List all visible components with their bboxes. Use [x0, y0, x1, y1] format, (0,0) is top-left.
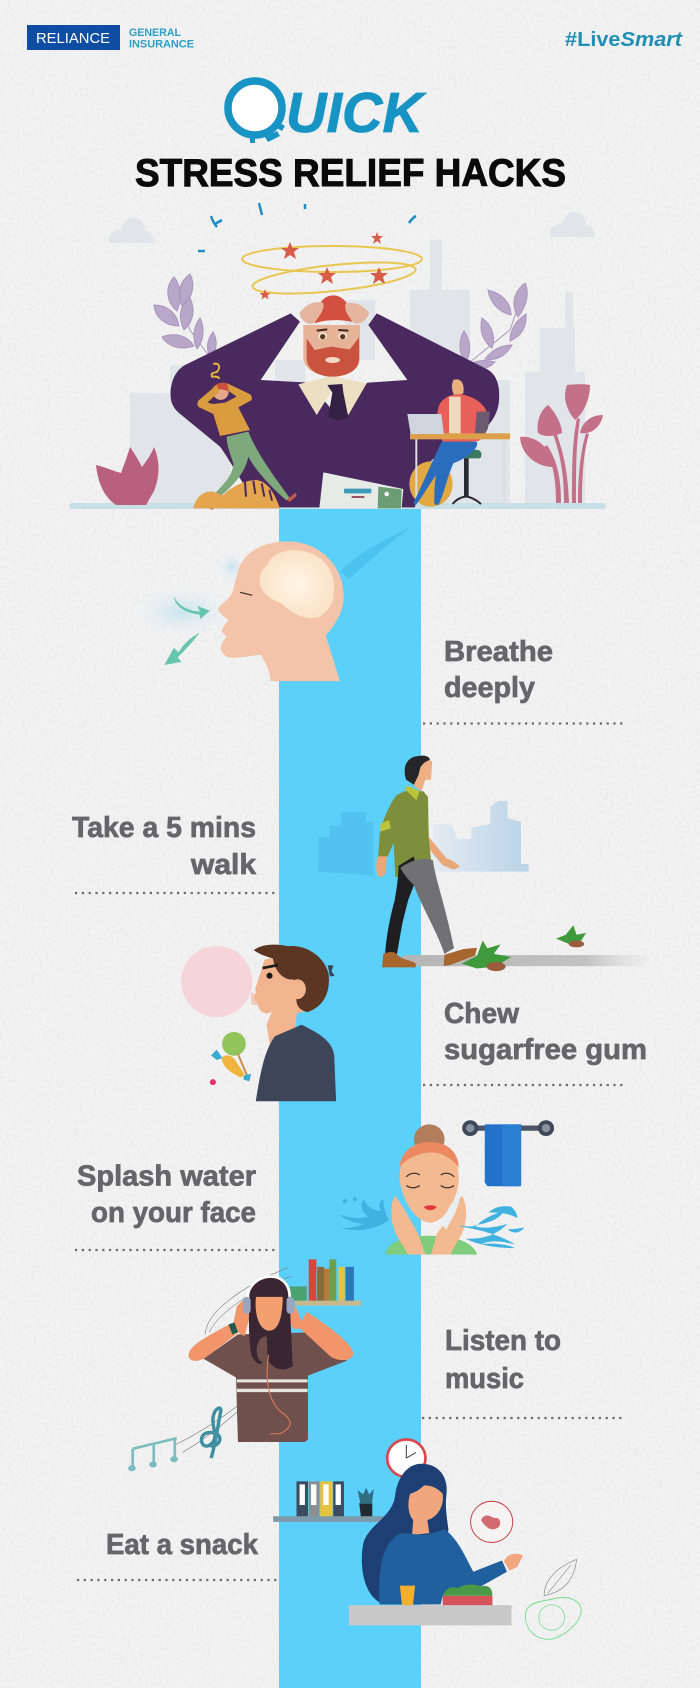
heading: Breathe — [444, 636, 553, 668]
bookshelf — [295, 1301, 361, 1306]
hack 4: splash water on your face — [75, 1122, 552, 1254]
heading: on your face — [91, 1197, 256, 1229]
title: stress relief hacks: STRESS RELIEF HACKS — [135, 152, 566, 195]
leaf branches — [154, 274, 527, 369]
hero illustration: stressed man — [69, 203, 606, 509]
heading — [72, 812, 257, 881]
icon: boy blowing bubble — [181, 945, 336, 1101]
heading: sugarfree gum — [444, 1034, 647, 1066]
heading: walk — [190, 849, 257, 881]
treble clef — [201, 1408, 221, 1458]
orange fan plant — [193, 480, 280, 508]
shelf — [273, 1516, 384, 1522]
hair — [362, 1464, 448, 1604]
logo: Reliance General Insurance: INSURANCE — [129, 38, 194, 50]
heading: music — [445, 1363, 524, 1395]
title: QUICK: UICK — [286, 81, 427, 145]
suit — [171, 313, 499, 507]
head — [303, 325, 360, 376]
small stressed woman — [197, 364, 297, 509]
heading — [445, 1325, 561, 1395]
hands — [299, 302, 369, 324]
icon: woman splashing water — [339, 1122, 552, 1254]
heading — [444, 636, 553, 704]
heading: Take a 5 mins — [72, 812, 256, 844]
heading — [77, 1160, 256, 1229]
icon: grass tufts — [462, 925, 586, 971]
confetti marks — [198, 203, 416, 251]
hack 6: eat a snack — [77, 1439, 581, 1639]
yellow plant — [409, 461, 453, 507]
heading: Splash water — [77, 1160, 256, 1192]
body — [204, 1332, 347, 1442]
heading: Listen to — [445, 1325, 561, 1357]
blue central band — [279, 508, 421, 1688]
logo: Reliance General Insurance: GENERAL — [129, 27, 181, 39]
hack 5: listen to music — [128, 1259, 624, 1471]
table — [349, 1605, 512, 1625]
sweater — [379, 1529, 507, 1604]
hack 1: breathe deeply — [136, 525, 627, 724]
small person at desk — [407, 379, 510, 508]
logo: Reliance General Insurance: RELIANCE — [36, 30, 110, 47]
skyline background — [130, 240, 585, 505]
icon: walking man — [318, 756, 647, 967]
music notes — [133, 1438, 177, 1468]
icon: head breathing — [136, 525, 414, 681]
icon: woman with headphones — [128, 1259, 361, 1471]
clouds — [109, 212, 595, 243]
ground line — [69, 503, 606, 509]
apple sketch — [471, 1501, 513, 1542]
plants — [96, 384, 603, 505]
collar and tie — [298, 376, 367, 415]
heading: Eat a snack — [106, 1529, 259, 1561]
heading: Chew — [444, 998, 519, 1030]
candy — [222, 1032, 246, 1056]
hack 3: chew sugarfree gum — [181, 945, 647, 1101]
papers and folder — [319, 472, 403, 508]
logo: Reliance General Insurance — [27, 25, 194, 50]
heading: deeply — [444, 672, 535, 704]
hashtag: #LiveSmart — [565, 29, 683, 51]
icon: woman eating — [273, 1439, 581, 1639]
figure group: big man — [171, 295, 510, 509]
heading — [444, 998, 647, 1066]
avocado sketch — [525, 1598, 581, 1639]
hack 2: take a 5 mins walk — [72, 756, 647, 971]
star halo — [242, 232, 422, 300]
clock — [387, 1439, 425, 1477]
food — [443, 1596, 492, 1606]
staff — [175, 1268, 292, 1452]
